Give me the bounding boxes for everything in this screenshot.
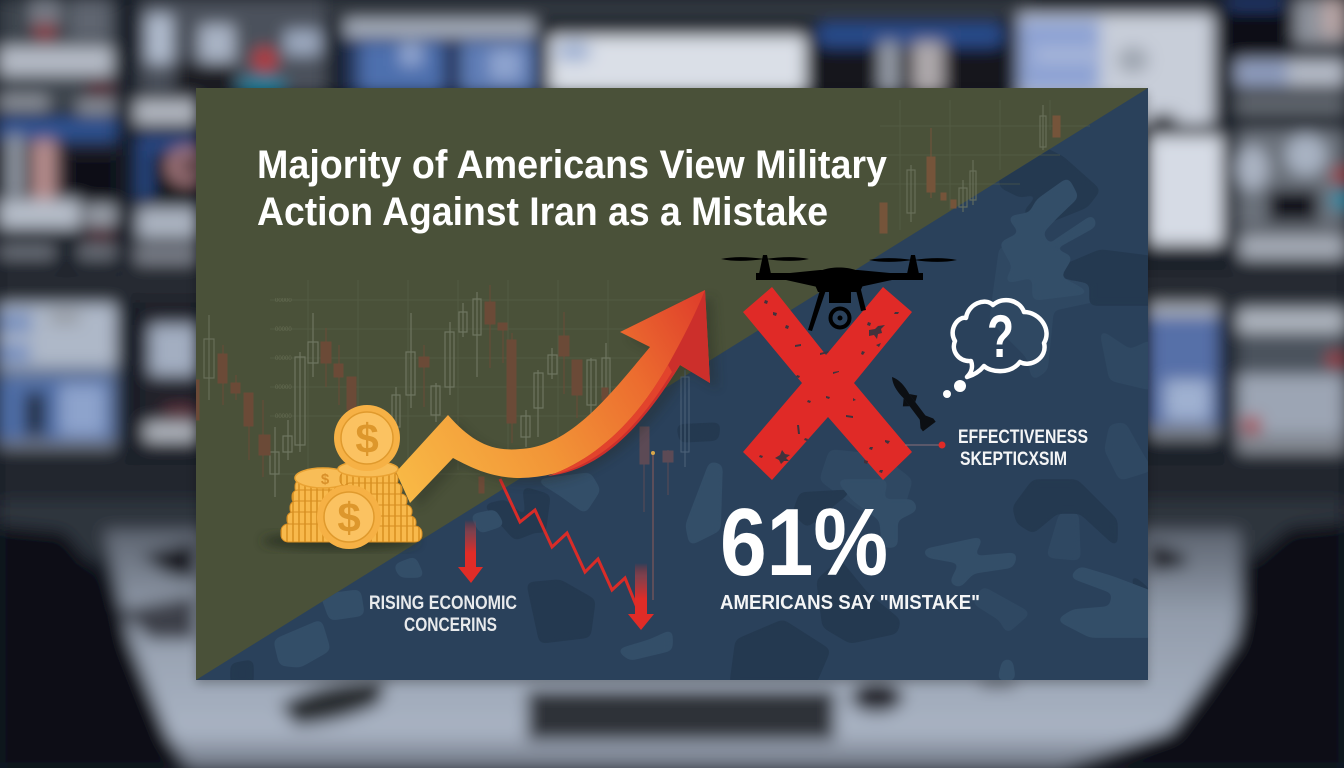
coin stack: $	[321, 471, 330, 488]
third row right	[1150, 304, 1218, 439]
arrow dark side	[548, 290, 710, 476]
icon: missile	[892, 377, 936, 432]
top left wide screen	[140, 0, 326, 92]
big stat: 61%: 61%	[720, 489, 888, 596]
drone motors	[759, 255, 771, 274]
icon: thought bubble with question mark: ?	[987, 303, 1014, 370]
top centre screens	[345, 22, 535, 92]
right coin pile	[338, 461, 422, 542]
chart axis labels: 00000	[275, 298, 292, 304]
drone propellers	[721, 257, 809, 261]
camouflage medium patches	[990, 314, 1105, 334]
label: rising economic concerns: RISING ECONOMIC	[369, 592, 517, 614]
solid candles	[196, 116, 1060, 493]
icon: thought bubble with question mark	[943, 300, 1047, 398]
drone legs	[808, 290, 866, 331]
top coin	[334, 405, 400, 471]
arrow: rising orange arrow	[396, 290, 718, 509]
far left screens	[0, 0, 116, 112]
top coin: $	[355, 415, 379, 462]
callout label: effectiveness skepticism: EFFECTIVENESS	[958, 426, 1088, 448]
front coin: $	[337, 494, 361, 541]
front coin	[317, 485, 381, 549]
panel shadow	[196, 92, 1148, 684]
left coin pile	[281, 468, 351, 542]
panel: olive upper triangle	[196, 88, 1148, 680]
chart axis labels	[275, 298, 292, 420]
desk	[0, 460, 1344, 530]
hollow candles	[204, 105, 1046, 497]
drone body	[816, 268, 862, 292]
indicator line	[651, 451, 655, 600]
arrow body	[396, 290, 710, 503]
X distress marks	[759, 300, 899, 473]
chairs	[0, 526, 182, 768]
callout label: effectiveness skepticism	[959, 430, 1088, 465]
desk objects	[141, 542, 196, 580]
chart axis labels: 00000	[275, 327, 292, 333]
drone arms	[756, 270, 923, 288]
arrow: small down arrow left	[458, 520, 483, 583]
faint candlestick chart	[196, 100, 1090, 512]
coin shadow	[262, 532, 418, 550]
top right screens	[1019, 14, 1213, 124]
title: Action Against Iran as a Mistake	[257, 190, 828, 234]
label: rising economic concerns: CONCERINS	[404, 614, 497, 636]
callout pointer	[905, 442, 946, 448]
candles on navy	[640, 370, 689, 512]
chart grid	[270, 100, 1090, 500]
camouflage light patches	[274, 178, 1155, 680]
chart axis labels: 00000	[275, 356, 292, 362]
panel: navy lower triangle with camouflage	[196, 88, 1155, 685]
arrow: small down arrow right	[628, 563, 654, 630]
title: Majority of Americans View Military	[257, 143, 888, 187]
icon: drone	[721, 255, 957, 331]
arrow: falling zigzag line	[500, 479, 638, 610]
stat label: AMERICANS SAY "MISTAKE"	[720, 592, 980, 614]
title	[257, 143, 888, 234]
label: rising economic concerns	[369, 592, 517, 636]
coin stack	[262, 405, 422, 550]
third row left	[0, 304, 116, 449]
big red X	[743, 287, 912, 480]
arrow shadow	[408, 296, 718, 509]
chart axis labels: 00000	[275, 385, 292, 391]
camouflage dark patches	[231, 147, 1155, 685]
infographic panel	[196, 88, 1155, 685]
chart axis labels: 00000	[275, 414, 292, 420]
drone gimbal camera	[829, 292, 851, 303]
callout label: effectiveness skepticism: SKEPTICXSIM	[960, 448, 1067, 470]
